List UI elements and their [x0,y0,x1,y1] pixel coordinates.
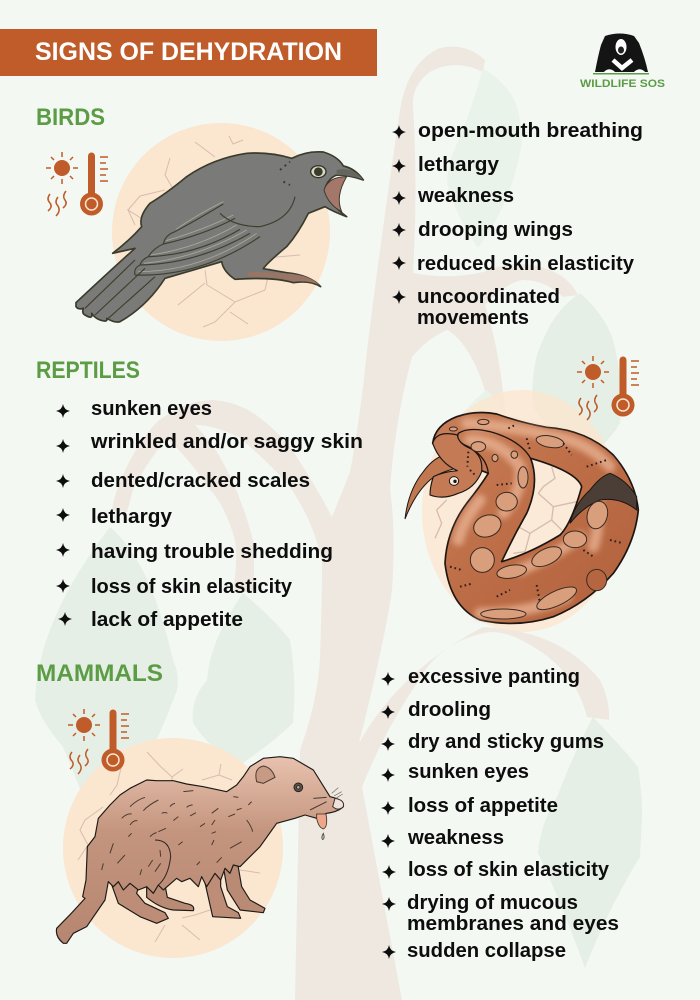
signs list: reptiles: sunken eyes [91,398,212,420]
signs list: birds: reduced skin elasticity [417,253,635,275]
signs list: reptiles: dented/cracked scales [91,470,310,492]
near front leg [204,872,241,918]
signs list: reptiles: loss of skin elasticity [91,576,293,598]
background circle: reptiles [422,390,622,632]
signs list: reptiles: lack of appetite [91,609,243,631]
fur marks [102,791,327,875]
signs list: mammals [381,666,619,962]
title banner [0,29,377,76]
second coil edge [458,430,531,473]
scale markings [449,419,611,619]
signs list: birds: lethargy [418,154,500,176]
ear [256,766,275,783]
illustration: mongoose [56,757,344,943]
near hind leg [110,880,168,923]
illustration: crow [76,152,363,322]
signs list: birds: movements [417,307,529,329]
snake tail [405,456,457,519]
signs list: birds: open-mouth breathing [418,120,643,142]
background circle: mammals [63,738,283,958]
heat icon: reptiles [577,356,639,420]
heading: mammals: MAMMALS [36,660,163,687]
signs list: reptiles: having trouble shedding [91,541,333,563]
bullet [392,125,406,304]
panel: reptiles [36,356,639,632]
snake highlights [458,423,610,613]
illustration: snake [405,412,638,623]
heat icon: mammals [68,709,129,774]
signs list: birds: uncoordinated [417,286,560,308]
cracked ground [78,752,260,942]
signs list: reptiles: lethargy [91,506,173,528]
whiskers [332,788,343,798]
signs list: mammals: drooling [408,699,491,721]
title banner: SIGNS OF DEHYDRATION [35,38,342,66]
drool drop [322,833,324,840]
signs list: mammals: sunken eyes [408,761,529,783]
signs list: mammals: drying of mucous [407,892,578,914]
eye [294,783,303,792]
signs list: mammals: sudden collapse [407,940,566,962]
far hind leg [147,885,194,911]
haunch [155,840,171,885]
shedding skin patch [570,473,637,523]
signs list: mammals: excessive panting [408,666,580,688]
snake body [433,412,638,623]
logo: Wildlife SOS [580,34,665,90]
panel: mammals [36,660,619,962]
panel: birds [36,104,643,341]
signs list: mammals: weakness [407,827,504,849]
heading: reptiles: REPTILES [36,357,140,384]
logo: Wildlife SOS: WILDLIFE SOS [580,78,665,90]
signs list: reptiles [56,398,363,631]
signs list: mammals: membranes and eyes [407,913,619,935]
heat icon: birds [46,152,108,216]
signs list: mammals: loss of appetite [408,795,558,817]
snake neck and head [430,434,482,497]
bullet [56,404,72,626]
signs list: birds [392,120,643,329]
signs list: birds: weakness [417,185,514,207]
far front leg [223,862,265,913]
background leaves [35,68,642,968]
background tree [112,46,609,1000]
body and tail [56,757,343,943]
nose [333,798,344,809]
heading: birds: BIRDS [36,104,105,131]
cracked ground [128,136,300,327]
signs list: mammals: loss of skin elasticity [408,859,610,881]
signs list: mammals: dry and sticky gums [408,731,604,753]
signs list: reptiles: wrinkled and/or saggy skin [90,431,363,453]
bullet [381,672,396,959]
background circle: birds [112,123,330,341]
signs list: birds: drooping wings [418,219,573,241]
wing feathers [138,202,257,272]
tongue [317,814,327,829]
